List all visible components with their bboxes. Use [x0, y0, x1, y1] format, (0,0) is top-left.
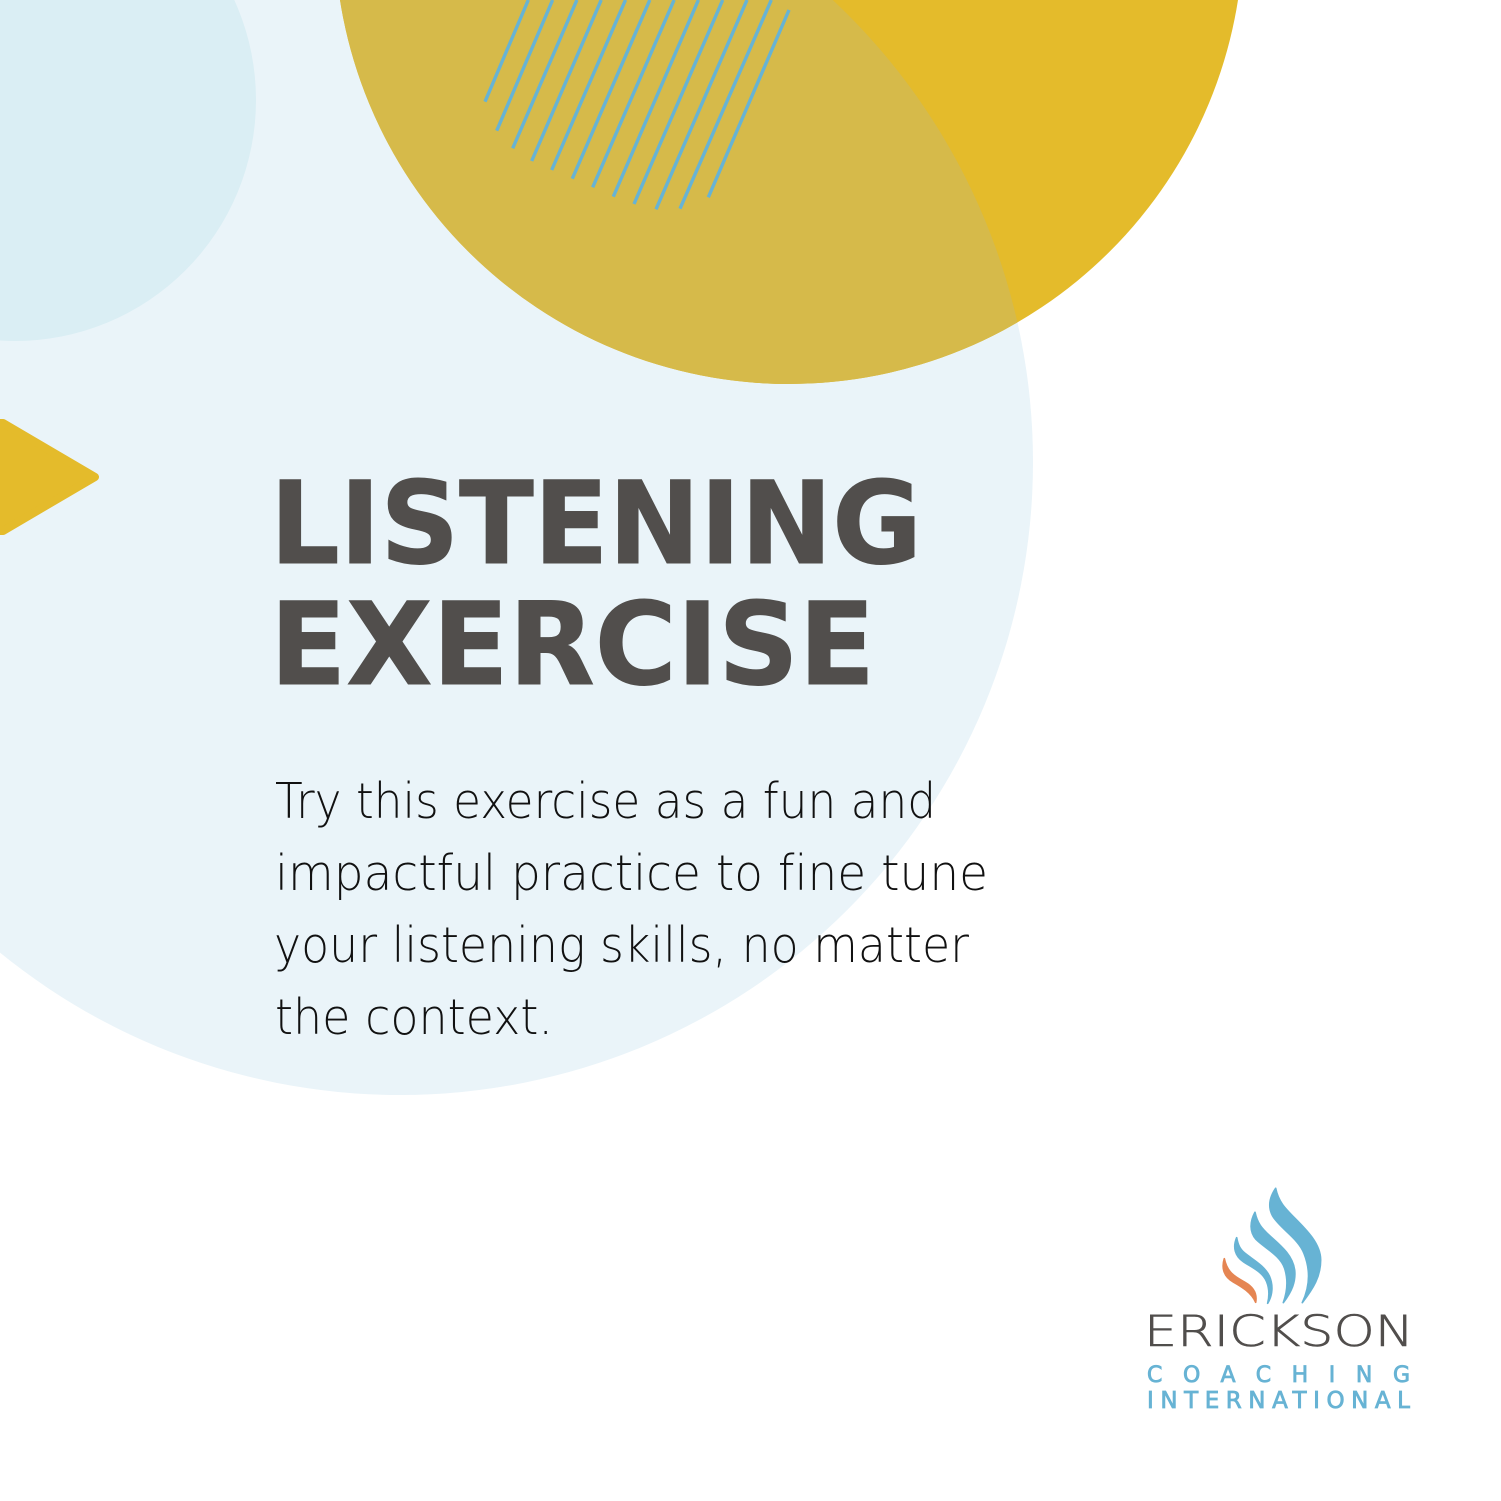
body text: the context. [275, 989, 553, 1046]
body text: your listening skills, no matter [274, 917, 970, 974]
title [270, 457, 922, 711]
yellow circle overlap with blue circle [340, 0, 1018, 384]
icon: flame mark [1223, 1188, 1321, 1303]
logo: Erickson Coaching International [1144, 1188, 1414, 1414]
body text: impactful practice to fine tune [275, 845, 988, 902]
large yellow circle [334, 0, 1244, 384]
body text: Try this exercise as a fun and [275, 773, 936, 830]
title: EXERCISE [270, 578, 875, 711]
yellow triangle pointer [0, 423, 95, 531]
body text [274, 773, 988, 1046]
wordmark: Coaching: COACHING [1147, 1363, 1410, 1388]
wordmark: Erickson: ERICKSON [1144, 1307, 1414, 1357]
title: LISTENING [270, 457, 922, 590]
small pale teal circle [0, 0, 256, 341]
diagonal blue hatch lines [485, 0, 789, 209]
large pale blue circle [0, 0, 1033, 1095]
wordmark: International: INTERNATIONAL [1147, 1388, 1410, 1414]
